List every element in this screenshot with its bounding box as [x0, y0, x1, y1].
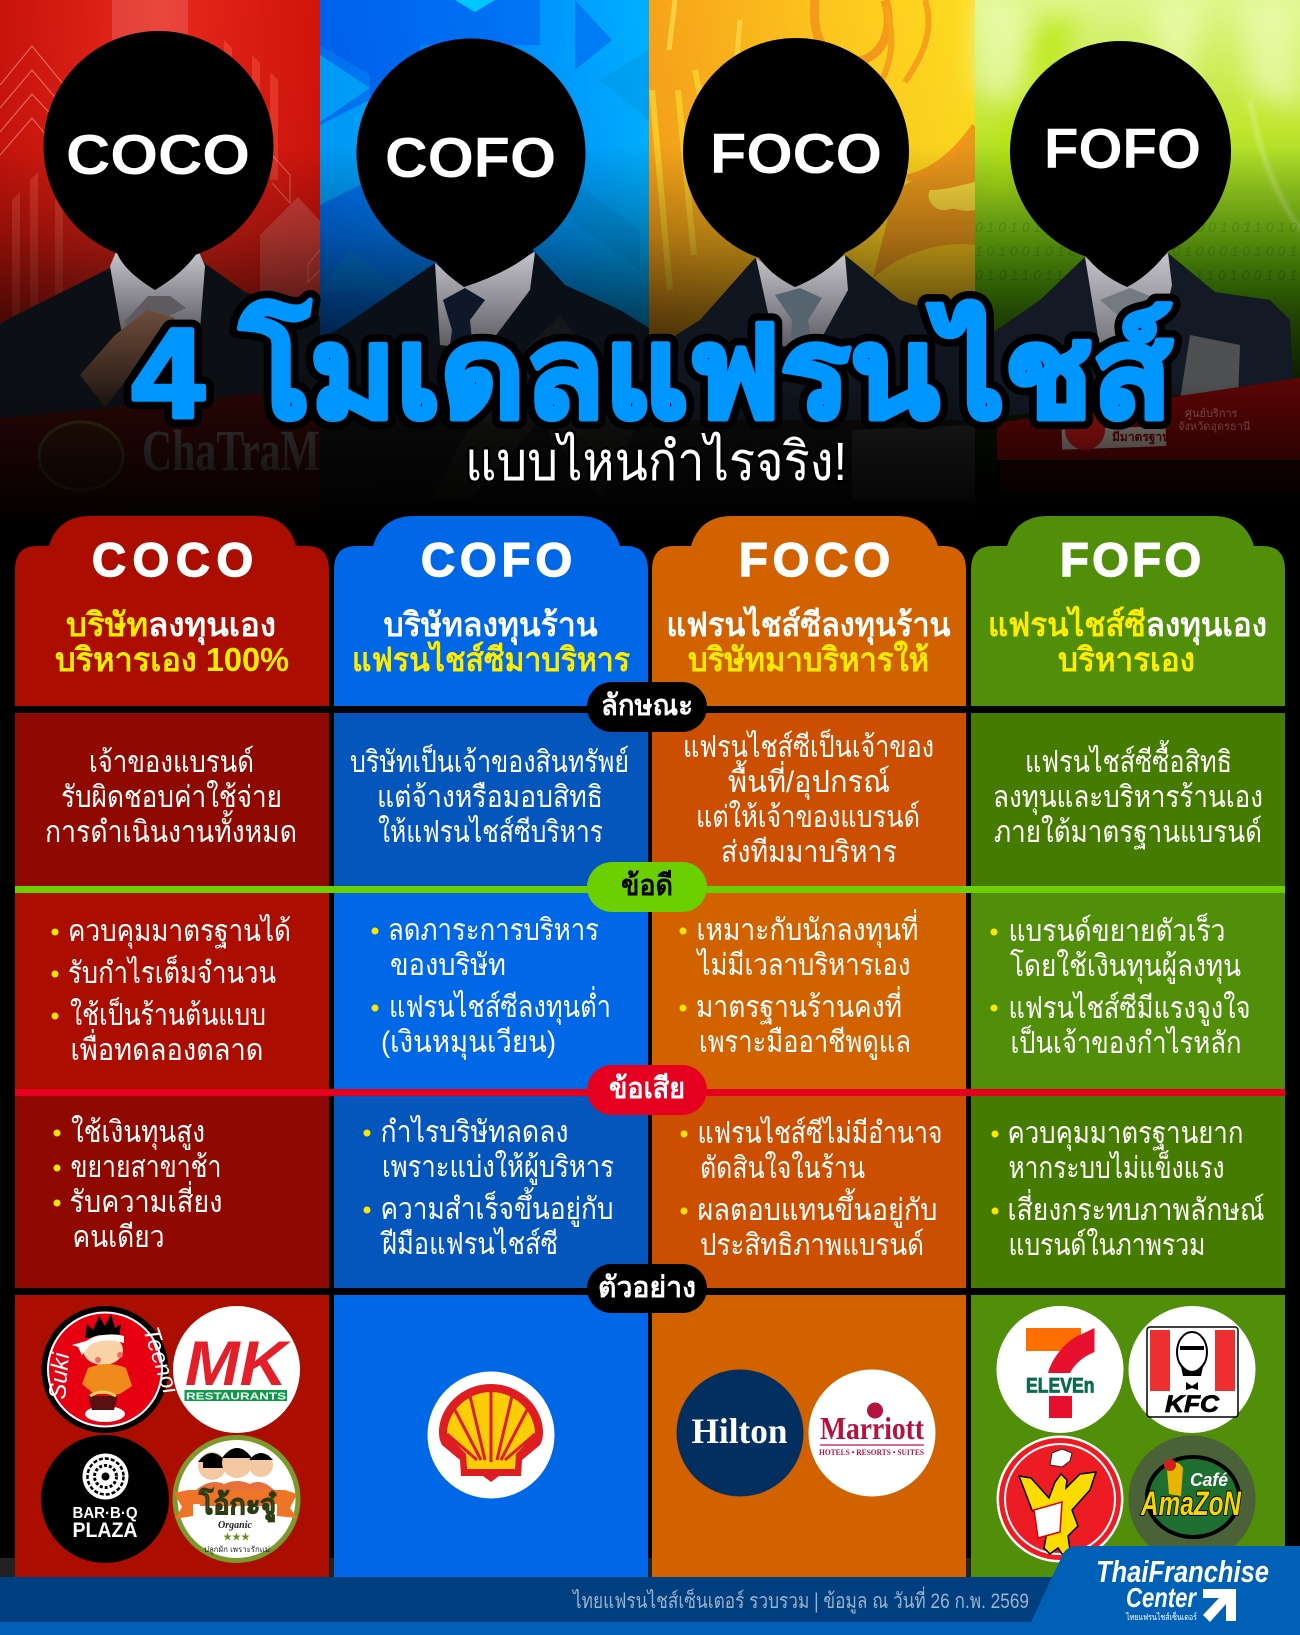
logo: Suki Teenoi [42, 1306, 184, 1433]
logo: Shell [428, 1372, 554, 1498]
head: FOFO [1010, 41, 1231, 287]
label pill: advantages [587, 862, 707, 912]
presenter figure: COCO [0, 252, 320, 520]
subheading: FOFO: แฟรนไชส์ซีลงทุนเอง [988, 605, 1267, 646]
advantages: FOCO: เหมาะกับนักลงทุนที่ [696, 909, 918, 949]
logo: Organic: ★★★ [223, 1532, 250, 1542]
brand logo: ThaiFranchise Center [1025, 1546, 1300, 1635]
logo: Marriott: Marriott [820, 1410, 924, 1446]
header card: COCO [15, 516, 329, 706]
logo: Marriott [808, 1370, 936, 1496]
panel: red COCO background [0, 0, 320, 520]
heading: COCO: COCO [92, 533, 253, 586]
logo: MK Restaurants: RESTAURANTS [186, 1390, 286, 1402]
advantages: FOCO [680, 909, 918, 1060]
disadvantages: FOCO: ประสิทธิภาพแบรนด์ [700, 1228, 924, 1262]
logo: Chester's [996, 1436, 1124, 1562]
disadvantages: FOFO [992, 1117, 1264, 1262]
panel: blue COFO background [320, 0, 649, 520]
advantages: FOFO: โดยใช้เงินทุนผู้ลงทุน [1010, 948, 1241, 985]
advantages: COCO: ใช้เป็นร้านต้นแบบ [70, 996, 266, 1032]
advantages: FOCO: ไม่มีเวลาบริหารเอง [696, 947, 910, 982]
brand logo: ThaiFranchise Center: Center [1126, 1582, 1198, 1613]
label pill: advantages: ข้อดี [621, 870, 673, 902]
advantages: COCO [52, 913, 291, 1067]
logo: 7-Eleven: ELEVEn [1026, 1374, 1094, 1398]
panel: green FOFO background: 0101010010110100101001011010 [975, 219, 1300, 235]
subheading: FOFO: บริหารเอง [1058, 641, 1195, 678]
characteristics: COCO: เจ้าของแบรนด์ [89, 745, 254, 779]
row backgrounds: COFO [334, 713, 648, 1577]
characteristics: COFO: แต่จ้างหรือมอบสิทธิ [377, 781, 603, 814]
label pill: characteristics [587, 682, 707, 732]
disadvantages: COCO: ใช้เงินทุนสูง [71, 1115, 205, 1151]
subheading: COFO: แฟรนไชส์ซีมาบริหาร [352, 640, 630, 678]
characteristics: FOFO: ลงทุนและบริหารร้านเอง [993, 781, 1263, 816]
characteristics: FOFO [993, 740, 1263, 850]
panel: FOCO column [652, 516, 966, 1577]
subheading: COCO: บริหารเอง 100% [55, 641, 289, 678]
logo: Bar-B-Q Plaza [41, 1435, 169, 1563]
advantages: COFO: แฟรนไชส์ซีลงทุนต่ำ [389, 986, 611, 1026]
disadvantages: FOFO: แบรนด์ในภาพรวม [1008, 1228, 1206, 1262]
disadvantages: COFO: ฝีมือแฟรนไชส์ซี [380, 1226, 558, 1261]
head: FOCO [683, 38, 909, 287]
logo: Organic: Organic [218, 1520, 253, 1531]
label pill: disadvantages [587, 1065, 707, 1115]
panel: green FOFO background: 1010010100010110101000101001 [975, 243, 1300, 259]
subheading: COFO: บริษัทลงทุนร้าน [384, 606, 598, 646]
logo: KFC [1128, 1306, 1256, 1433]
advantages: COFO: ของบริษัท [390, 949, 506, 982]
disadvantages: FOCO: แฟรนไชส์ซีไม่มีอำนาจ [698, 1115, 942, 1150]
advantages: COFO: ลดภาระการบริหาร [388, 914, 599, 947]
characteristics: FOCO: ส่งทีมมาบริหาร [721, 836, 897, 869]
characteristics: FOCO: แต่ให้เจ้าของแบรนด์ [696, 800, 920, 834]
disadvantages: COFO: เพราะแบ่งให้ผู้บริหาร [382, 1150, 614, 1185]
subtitle: แบบไหนกำไรจริง! [465, 431, 847, 492]
characteristics: FOCO [683, 728, 934, 869]
advantages: FOFO: เป็นเจ้าของกำไรหลัก [1010, 1024, 1242, 1060]
logo: Suki Teenoi: Teenoi [138, 1324, 184, 1397]
subheading: FOCO: แฟรนไชส์ซีลงทุนร้าน [666, 605, 951, 646]
advantages: COFO: (เงินหมุนเวียน) [381, 1026, 556, 1061]
hero darkening gradient [0, 0, 1300, 520]
label pill: characteristics: ลักษณะ [601, 690, 693, 722]
disadvantages: FOFO: ควบคุมมาตรฐานยาก [1008, 1117, 1244, 1152]
presenter figure: FOFO: มีมาตรฐาน [1112, 430, 1171, 445]
brand logo: ThaiFranchise Center: ThaiFranchise [1096, 1554, 1269, 1589]
characteristics: FOFO: ภายใต้มาตรฐานแบรนด์ [994, 815, 1262, 850]
advantages: FOCO: เพราะมืออาชีพดูแล [699, 1026, 911, 1060]
logo: Hilton: Hilton [692, 1411, 788, 1451]
logo: MK Restaurants [173, 1306, 300, 1433]
logo: Bar-B-Q Plaza: PLAZA [72, 1519, 138, 1542]
label pill: examples: ตัวอย่าง [598, 1272, 696, 1304]
characteristics: FOCO: พื้นที่/อุปกรณ์ [728, 760, 890, 801]
logo: Cafe Amazon: Café [1190, 1470, 1228, 1490]
heading: FOCO: FOCO [739, 533, 890, 586]
label pill: examples [587, 1264, 707, 1313]
presenter figure: FOCO [649, 255, 975, 520]
characteristics: COCO: การดำเนินงานทั้งหมด [45, 810, 297, 849]
advantages: FOFO: แฟรนไชส์ซีมีแรงจูงใจ [1008, 990, 1250, 1026]
subheading: COFO [352, 606, 630, 678]
header card: COFO [334, 516, 648, 706]
head: COCO: COCO [66, 123, 250, 187]
subheading: FOCO [666, 605, 951, 678]
logo: Marriott: HOTELS • RESORTS • SUITES [819, 1448, 925, 1457]
subheading: COCO [55, 606, 289, 678]
presenter figure: FOFO: จังหวัดอุดรธานี [1178, 420, 1251, 433]
head: COFO [356, 38, 586, 287]
characteristics: COCO: รับผิดชอบค่าใช้จ่าย [61, 780, 282, 814]
lower-hero fade [0, 380, 1300, 520]
logo: Hilton [676, 1370, 804, 1496]
disadvantages: FOCO: ตัดสินใจในร้าน [700, 1151, 865, 1185]
characteristics: FOCO: แฟรนไชส์ซีเป็นเจ้าของ [683, 728, 934, 764]
hero background panels [0, 0, 1300, 520]
logo: Bar-B-Q Plaza: BAR·B·Q [72, 1505, 138, 1522]
panel: yellow FOCO background [649, 0, 975, 520]
divider: advantages [15, 886, 1285, 893]
title: 4 โมเดลแฟรนไชส์ [132, 299, 1172, 444]
presenter figure: COCO: ChaTraM [142, 418, 320, 483]
head: COFO: COFO [385, 126, 556, 190]
footer band [0, 1558, 1300, 1635]
heading: FOFO: FOFO [1060, 533, 1201, 586]
advantages: COCO: รับกำไรเต็มจำนวน [68, 954, 276, 990]
logo: Cafe Amazon [1128, 1436, 1256, 1562]
header card: FOFO [971, 516, 1285, 706]
advantages: FOFO [990, 912, 1250, 1060]
disadvantages: COCO: รับความเสี่ยง [70, 1181, 222, 1219]
logo: Cafe Amazon: AmaZoN [1140, 1485, 1242, 1523]
panel: green FOFO background: 0101101110101001011110100101 [975, 267, 1300, 283]
logo: 7-Eleven [996, 1306, 1124, 1433]
panel: COFO column [334, 516, 648, 1577]
row backgrounds: FOCO [652, 713, 966, 1577]
characteristics: FOFO: แฟรนไชส์ซีซื้อสิทธิ [1025, 740, 1232, 779]
title: 4 โมเดลแฟรนไชส์ [132, 299, 1172, 444]
disadvantages: COFO [364, 1114, 614, 1261]
heading: COFO: COFO [421, 533, 572, 586]
subheading: FOFO [988, 605, 1267, 678]
characteristics: COFO [350, 743, 629, 849]
presenter figure: FOFO: ศูนย์บริการ [1185, 407, 1238, 420]
logo: KFC: KFC [1165, 1391, 1220, 1418]
disadvantages: FOFO: เสี่ยงกระทบภาพลักษณ์ [1008, 1189, 1264, 1227]
disadvantages: FOCO [680, 1115, 942, 1262]
head: FOCO: FOCO [710, 122, 882, 186]
characteristics: COCO [45, 745, 297, 849]
presenter figure: FOFO [975, 253, 1300, 490]
characteristics: COFO: ให้แฟรนไชส์ซีบริหาร [378, 814, 603, 849]
panel: FOFO column [971, 516, 1285, 1577]
advantages: COCO: ควบคุมมาตรฐานได้ [68, 913, 291, 950]
characteristics: COFO: บริษัทเป็นเจ้าของสินทรัพย์ [350, 743, 629, 779]
footer source text: ไทยแฟรนไชส์เซ็นเตอร์ รวบรวม | ข้อมูล ณ วันที่ 26 ก.พ. 2569 [571, 1586, 1029, 1614]
disadvantages: FOFO: หากระบบไม่แข็งแรง [1008, 1149, 1224, 1185]
disadvantages: COCO: ขยายสาขาช้า [70, 1151, 222, 1184]
advantages: COCO: เพื่อทดลองตลาด [70, 1029, 264, 1067]
subheading: COCO: บริษัทลงทุนเอง [66, 606, 276, 646]
brand logo: ThaiFranchise Center: ไทยแฟรนไชส์เซ็นเตอร์ [1125, 1610, 1197, 1622]
logo: Organic [174, 1438, 298, 1560]
panel: green FOFO background [975, 0, 1300, 520]
advantages: COFO [372, 914, 611, 1061]
logo: Organic: ปลูกผัก เพราะรักแม่ [204, 1545, 270, 1555]
subheading: FOCO: บริษัทมาบริหารให้ [688, 640, 929, 678]
panel: COCO column [15, 516, 329, 1577]
header card: FOCO [652, 516, 966, 706]
disadvantages: COCO [54, 1115, 222, 1254]
row backgrounds: FOFO [971, 713, 1285, 1577]
head: FOFO: FOFO [1044, 117, 1201, 181]
divider: disadvantages [15, 1089, 1285, 1096]
advantages: FOCO: มาตรฐานร้านคงที่ [696, 986, 902, 1025]
disadvantages: COFO: กำไรบริษัทลดลง [380, 1114, 568, 1149]
head: COCO [44, 31, 274, 290]
disadvantages: COFO: ความสำเร็จขึ้นอยู่กับ [380, 1187, 614, 1227]
presenter figure: COFO [320, 252, 649, 520]
disadvantages: COCO: คนเดียว [72, 1221, 164, 1254]
logo: Suki Teenoi: Suki [44, 1351, 75, 1401]
row backgrounds: COCO [15, 713, 329, 1577]
advantages: FOFO: แบรนด์ขยายตัวเร็ว [1008, 912, 1226, 948]
label pill: disadvantages: ข้อเสีย [609, 1073, 685, 1105]
logo: MK Restaurants: MK [185, 1329, 292, 1399]
disadvantages: FOCO: ผลตอบแทนขึ้นอยู่กับ [698, 1188, 938, 1228]
logo: Organic: โอ้กะจู๋ [198, 1487, 276, 1522]
